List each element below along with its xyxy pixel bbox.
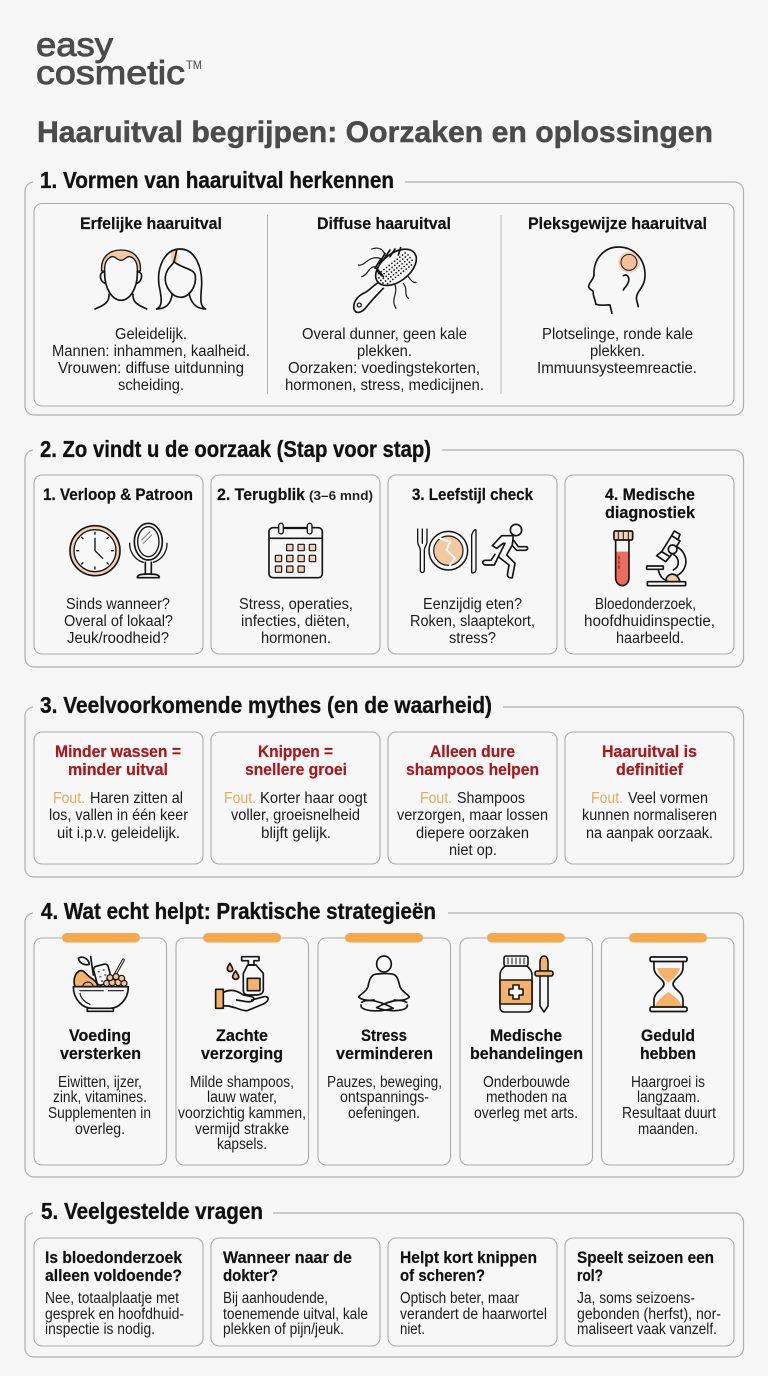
card: myth 3: verzorgen, maar lossen xyxy=(397,807,548,824)
card: FAQ 4: maliseert vaak vanzelf. xyxy=(577,1321,717,1338)
card: myth 1 xyxy=(34,732,203,864)
card: Medische behandelingen: methoden na xyxy=(486,1089,567,1106)
logo: easy cosmetic xyxy=(36,26,202,91)
icon: test tube and microscope xyxy=(614,531,686,586)
card: Voeding versterken: overleg. xyxy=(75,1121,125,1138)
panel: 1. Vormen van haaruitval herkennen xyxy=(25,167,744,415)
card: Medische behandelingen: overleg met arts. xyxy=(474,1105,578,1122)
card: FAQ 1: Is bloedonderzoek xyxy=(45,1249,183,1267)
card: myth 3: diepere oorzaken xyxy=(416,825,529,842)
card: myth 2: Korter haar oogt xyxy=(260,790,368,807)
card: FAQ 4: Ja, soms seizoens- xyxy=(577,1290,695,1307)
card: myth 4: definitief xyxy=(616,761,683,779)
card: Geduld hebben xyxy=(602,933,734,1165)
logo: easy cosmetic: TM xyxy=(186,58,202,72)
card: Stress verminderen: ontspannings- xyxy=(340,1089,429,1106)
card: Terugblik: 2. Terugblik xyxy=(217,486,306,504)
card: FAQ 3 xyxy=(388,1238,557,1346)
card: Medische diagnostiek: diagnostiek xyxy=(605,504,696,522)
card: FAQ 3: verandert de haarwortel xyxy=(400,1306,547,1323)
icon: food bowl xyxy=(73,957,128,1011)
card: FAQ 4: gebonden (herfst), nor- xyxy=(577,1306,721,1323)
card: FAQ 2: Wanneer naar de xyxy=(223,1249,352,1267)
card: Diffuse haaruitval: Overal dunner, geen kale xyxy=(302,326,467,343)
card: Diffuse haaruitval: Diffuse haaruitval xyxy=(317,215,451,233)
card: Pleksgewijze haaruitval xyxy=(528,215,707,377)
card: Medische diagnostiek: Bloedonderzoek, xyxy=(595,596,696,613)
panel: 2. Zo vindt u de oorzaak xyxy=(25,436,744,667)
card: Stress verminderen: verminderen xyxy=(336,1045,433,1063)
card: myth 2: snellere groei xyxy=(245,761,347,779)
card: Geduld hebben: langzaam. xyxy=(637,1089,700,1106)
card: Stress verminderen: Stress xyxy=(361,1027,407,1045)
card: myth 2: voller, groeisnelheid xyxy=(231,807,360,824)
card: Zachte verzorging: Zachte xyxy=(216,1027,268,1045)
card: Voeding versterken xyxy=(34,933,166,1165)
card: Erfelijke haaruitval: Mannen: inhammen, kaalheid. xyxy=(52,343,250,360)
card: myth 1: minder uitval xyxy=(68,761,168,779)
card: Geduld hebben: maanden. xyxy=(638,1121,698,1138)
card: Terugblik: (3–6 mnd) xyxy=(309,488,373,503)
card: Pleksgewijze haaruitval: Pleksgewijze haaruitval xyxy=(528,215,707,233)
card: Medische behandelingen: Medische xyxy=(490,1027,562,1045)
card: Erfelijke haaruitval: Vrouwen: diffuse uitdunning xyxy=(58,360,244,377)
card: Leefstijl check: Roken, slaaptekort, xyxy=(410,613,535,630)
card: FAQ 2 xyxy=(211,1238,380,1346)
card: Voeding versterken: zink, vitamines. xyxy=(53,1089,147,1106)
icon: head with bald patch xyxy=(589,247,645,313)
card: myth 3: Alleen dure xyxy=(430,743,515,761)
card: Geduld hebben: hebben xyxy=(640,1045,696,1063)
card: FAQ 4 xyxy=(565,1238,734,1346)
card: Geduld hebben: Haargroei is xyxy=(631,1074,705,1091)
card: Medische diagnostiek: 4. Medische xyxy=(605,486,695,504)
icon: male and female heads xyxy=(95,249,206,309)
card: FAQ 2: toenemende uitval, kale xyxy=(223,1306,368,1323)
card: Verloop en Patroon: Overal of lokaal? xyxy=(64,613,173,630)
card: Zachte verzorging: Milde shampoos, xyxy=(190,1074,294,1091)
card: myth 3: niet op. xyxy=(449,842,497,859)
card: Zachte verzorging: kapsels. xyxy=(217,1136,267,1153)
card: Leefstijl check xyxy=(388,475,557,654)
card: Leefstijl check: Eenzijdig eten? xyxy=(423,596,522,613)
card: Pleksgewijze haaruitval: plekken. xyxy=(590,343,645,360)
card: Zachte verzorging: voorzichtig kammen, xyxy=(178,1105,306,1122)
card: Erfelijke haaruitval: Geleidelijk. xyxy=(115,326,187,343)
card: Leefstijl check: 3. Leefstijl check xyxy=(412,486,534,504)
card: FAQ 4: rol? xyxy=(577,1267,603,1285)
logo: easy cosmetic: cosmetic xyxy=(36,54,185,91)
card: Diffuse haaruitval: plekken. xyxy=(357,343,412,360)
card: FAQ 2: plekken of pijn/jeuk. xyxy=(223,1321,344,1338)
card: FAQ 1 xyxy=(34,1238,203,1346)
card: Geduld hebben: Resultaat duurt xyxy=(622,1105,717,1122)
card: myth 2: Fout. xyxy=(224,790,256,807)
card: myth 1: Fout. xyxy=(53,790,85,807)
heading: section 1: 1. Vormen van haaruitval herkennen xyxy=(40,167,394,193)
card: Erfelijke haaruitval: Erfelijke haaruitval xyxy=(80,215,222,233)
card: Pleksgewijze haaruitval: Plotselinge, ronde kale xyxy=(542,326,693,343)
card: Stress verminderen: Pauzes, beweging, xyxy=(327,1074,442,1091)
card: FAQ 3: Helpt kort knippen xyxy=(400,1249,537,1267)
card: FAQ 3: Optisch beter, maar xyxy=(400,1290,519,1307)
card: Erfelijke haaruitval xyxy=(52,215,250,394)
card: Terugblik: Stress, operaties, xyxy=(239,596,353,613)
card: Stress verminderen: oefeningen. xyxy=(348,1105,420,1122)
card: Terugblik xyxy=(211,475,380,654)
card: FAQ 1: inspectie is nodig. xyxy=(45,1321,155,1338)
card: FAQ 2: dokter? xyxy=(223,1267,278,1285)
card: myth 3: shampoos helpen xyxy=(406,761,539,779)
card: Voeding versterken: versterken xyxy=(60,1045,141,1063)
card: FAQ 4: Speelt seizoen een xyxy=(577,1249,714,1267)
card: Medische diagnostiek: haarbeeld. xyxy=(616,630,684,647)
card: myth 4: na aanpak oorzaak. xyxy=(586,825,713,842)
card: Voeding versterken: Eiwitten, ijzer, xyxy=(58,1074,142,1091)
card: myth 4: Haaruitval is xyxy=(602,743,697,761)
panel: 3. Veelvoorkomende mythes xyxy=(25,692,744,877)
card: Verloop en Patroon xyxy=(34,475,203,654)
card: Verloop en Patroon: Jeuk/roodheid? xyxy=(67,630,169,647)
panel: 5. Veelgestelde vragen xyxy=(25,1198,744,1357)
card: myth 1: Minder wassen = xyxy=(55,743,181,761)
card: Leefstijl check: stress? xyxy=(449,630,496,647)
card: myth 3: Shampoos xyxy=(457,790,525,807)
logo: easy cosmetic: easy xyxy=(36,26,114,63)
heading: section 2: 2. Zo vindt u de oorzaak (Stap voor stap) xyxy=(40,436,431,462)
card: Stress verminderen xyxy=(318,933,450,1165)
card: myth 2: Knippen = xyxy=(258,743,333,761)
card: myth 2 xyxy=(211,732,380,864)
card: Terugblik: infecties, diëten, xyxy=(241,613,350,630)
card: Medische diagnostiek xyxy=(565,475,734,654)
card: myth 4: kunnen normaliseren xyxy=(582,807,717,824)
heading: section 4: 4. Wat echt helpt: Praktische strategieën xyxy=(41,898,436,924)
card: Diffuse haaruitval: Oorzaken: voedingstekorten, xyxy=(288,360,480,377)
icon: medicine bottle and dropper xyxy=(500,956,553,1012)
card: Medische diagnostiek: hoofdhuidinspectie, xyxy=(584,613,715,630)
card: myth 2: blijft gelijk. xyxy=(261,825,331,842)
icon: clock and mirror xyxy=(70,523,167,578)
card: Zachte verzorging: vermijd strakke xyxy=(195,1121,289,1138)
card: myth 4: Veel vormen xyxy=(628,790,708,807)
icon: calendar xyxy=(269,523,322,578)
icon: pump bottle and hand xyxy=(216,957,268,1011)
card: Zachte verzorging xyxy=(176,933,308,1165)
card: Terugblik: hormonen. xyxy=(261,630,331,647)
card: FAQ 1: alleen voldoende? xyxy=(45,1267,182,1285)
card: FAQ 2: Bij aanhoudende, xyxy=(223,1290,328,1307)
card: Erfelijke haaruitval: scheiding. xyxy=(118,377,184,394)
card: Diffuse haaruitval: hormonen, stress, medicijnen. xyxy=(285,377,484,394)
card: Medische behandelingen: Onderbouwde xyxy=(483,1074,570,1091)
card: Zachte verzorging: lauw water, xyxy=(207,1089,277,1106)
card: Voeding versterken: Supplementen in xyxy=(48,1105,151,1122)
card: FAQ 1: gesprek en hoofdhuid- xyxy=(45,1306,184,1323)
card: myth 1: Haren zitten al xyxy=(90,790,183,807)
icon: meditating person xyxy=(359,956,409,1011)
heading: section 5: 5. Veelgestelde vragen xyxy=(41,1198,263,1224)
card: FAQ 1: Nee, totaalplaatje met xyxy=(45,1290,180,1307)
panel: 4. Wat echt helpt xyxy=(25,898,744,1177)
card: Verloop en Patroon: Sinds wanneer? xyxy=(66,596,170,613)
card: myth 1: uit i.p.v. geleidelijk. xyxy=(57,825,180,842)
card: Voeding versterken: Voeding xyxy=(69,1027,131,1045)
icon: hourglass xyxy=(650,957,687,1012)
icon: hairbrush xyxy=(354,242,423,312)
card: myth 4: Fout. xyxy=(591,790,623,807)
card: Zachte verzorging: verzorging xyxy=(201,1045,283,1063)
card: Medische behandelingen xyxy=(460,933,592,1165)
card: Verloop en Patroon: 1. Verloop & Patroon xyxy=(43,486,193,504)
card: FAQ 3: of scheren? xyxy=(400,1267,485,1285)
icon: plate and runner xyxy=(418,524,528,578)
heading: section 3: 3. Veelvoorkomende mythes (en de waarheid) xyxy=(40,692,492,718)
card: Geduld hebben: Geduld xyxy=(641,1027,695,1045)
card: Pleksgewijze haaruitval: Immuunsysteemreactie. xyxy=(537,360,697,377)
card: myth 3 xyxy=(388,732,557,864)
card: Medische behandelingen: behandelingen xyxy=(470,1045,583,1063)
card: myth 3: Fout. xyxy=(420,790,452,807)
card: Diffuse haaruitval xyxy=(285,215,484,394)
title: Haaruitval begrijpen: Oorzaken en oplossingen xyxy=(37,116,713,149)
card: FAQ 3: niet. xyxy=(400,1321,425,1338)
card: myth 1: los, vallen in één keer xyxy=(49,807,188,824)
card: myth 4 xyxy=(565,732,734,864)
